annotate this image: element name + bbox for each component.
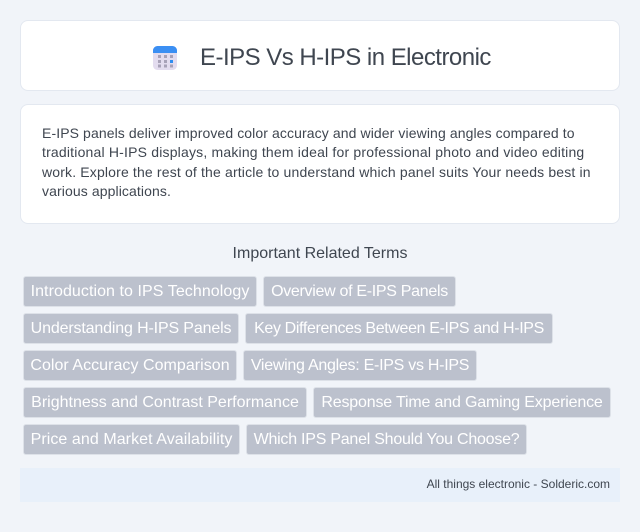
tag [23,350,237,381]
intro text: traditional H-IPS displays, making them ideal for professional photo and video editing [42,144,584,160]
icon: calendar [153,46,177,70]
title: E-IPS Vs H-IPS in Electronic [200,44,491,71]
tag [246,424,527,455]
tag [23,387,307,418]
intro text: various applications. [42,183,171,199]
tag: Price and Market Availability [31,431,232,448]
intro text: E-IPS panels deliver improved color accuracy and wider viewing angles compared to [42,125,575,141]
tag: Brightness and Contrast Performance [31,394,299,411]
tag [23,276,257,307]
tag: Viewing Angles: E-IPS vs H-IPS [251,357,469,374]
tag: Color Accuracy Comparison [30,357,230,374]
tag: Understanding H-IPS Panels [31,320,231,337]
related terms heading: Important Related Terms [233,245,407,262]
tag: Key Differences Between E-IPS and H-IPS [254,320,544,337]
tag: Which IPS Panel Should You Choose? [254,431,519,448]
footer [20,468,620,502]
tag [23,424,240,455]
tag [243,350,477,381]
tag: Overview of E-IPS Panels [271,283,448,300]
tag [263,276,456,307]
tag [23,313,239,344]
tag: Response Time and Gaming Experience [321,394,603,411]
footer credit: All things electronic - Solderic.com [427,477,610,491]
term tags [23,276,611,455]
tag [313,387,611,418]
tag: Introduction to IPS Technology [31,283,249,300]
tag [245,313,553,344]
intro panel [20,104,620,224]
intro text: work. Explore the rest of the article to understand which panel suits Your needs best in [42,164,591,180]
header panel [20,20,620,91]
intro text [42,125,591,199]
